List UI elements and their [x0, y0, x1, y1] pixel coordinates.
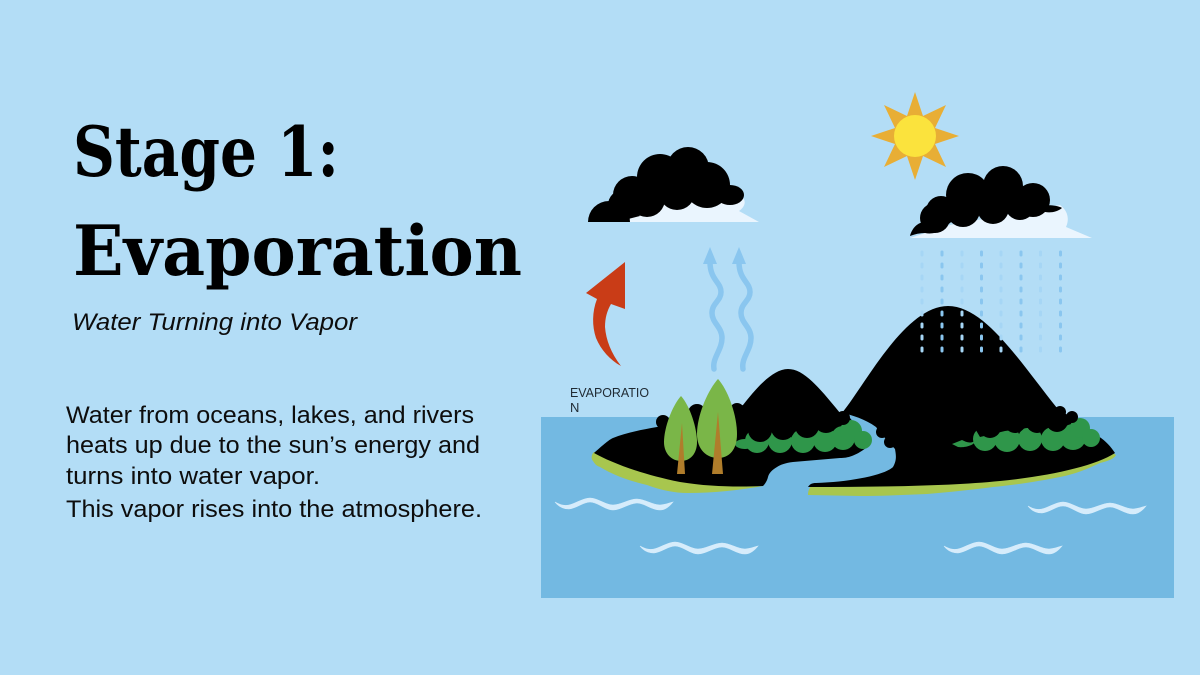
left shore	[592, 452, 763, 493]
label: evaporation: EVAPORATIO	[570, 385, 649, 400]
label: evaporation: N	[570, 400, 579, 415]
body text	[66, 402, 482, 523]
right tree	[697, 379, 737, 474]
left cloud	[588, 147, 759, 222]
subtitle: Water Turning into Vapor	[72, 309, 358, 336]
title: Stage 1:	[73, 112, 339, 193]
left bushes	[735, 420, 872, 453]
body text: heats up due to the sun’s energy and	[66, 432, 480, 459]
river	[841, 412, 878, 432]
wave 3	[1028, 502, 1146, 514]
body text: This vapor rises into the atmosphere.	[66, 496, 482, 523]
right shore	[808, 453, 1116, 496]
body text: turns into water vapor.	[66, 463, 320, 490]
big mountain and right land	[808, 306, 1115, 487]
arrow: red evaporation arrow	[586, 262, 625, 366]
left tree	[664, 396, 697, 474]
arrow: vapor rising 2	[732, 247, 751, 369]
island left with small mountain	[592, 369, 872, 493]
arrow: vapor rising 1	[703, 247, 722, 369]
ocean	[541, 417, 1174, 598]
right cloud	[910, 166, 1092, 238]
wave 1	[555, 498, 673, 510]
rain	[920, 250, 1062, 352]
island right with big mountain	[808, 306, 1116, 496]
label: evaporation	[570, 385, 649, 415]
small mountain and left land	[594, 369, 866, 487]
icon: sun	[871, 92, 959, 180]
wave 4	[944, 542, 1062, 554]
title	[73, 112, 522, 292]
wave 2	[640, 542, 758, 554]
right bushes	[952, 418, 1100, 452]
body text: Water from oceans, lakes, and rivers	[66, 402, 474, 429]
title: Evaporation	[73, 211, 522, 292]
